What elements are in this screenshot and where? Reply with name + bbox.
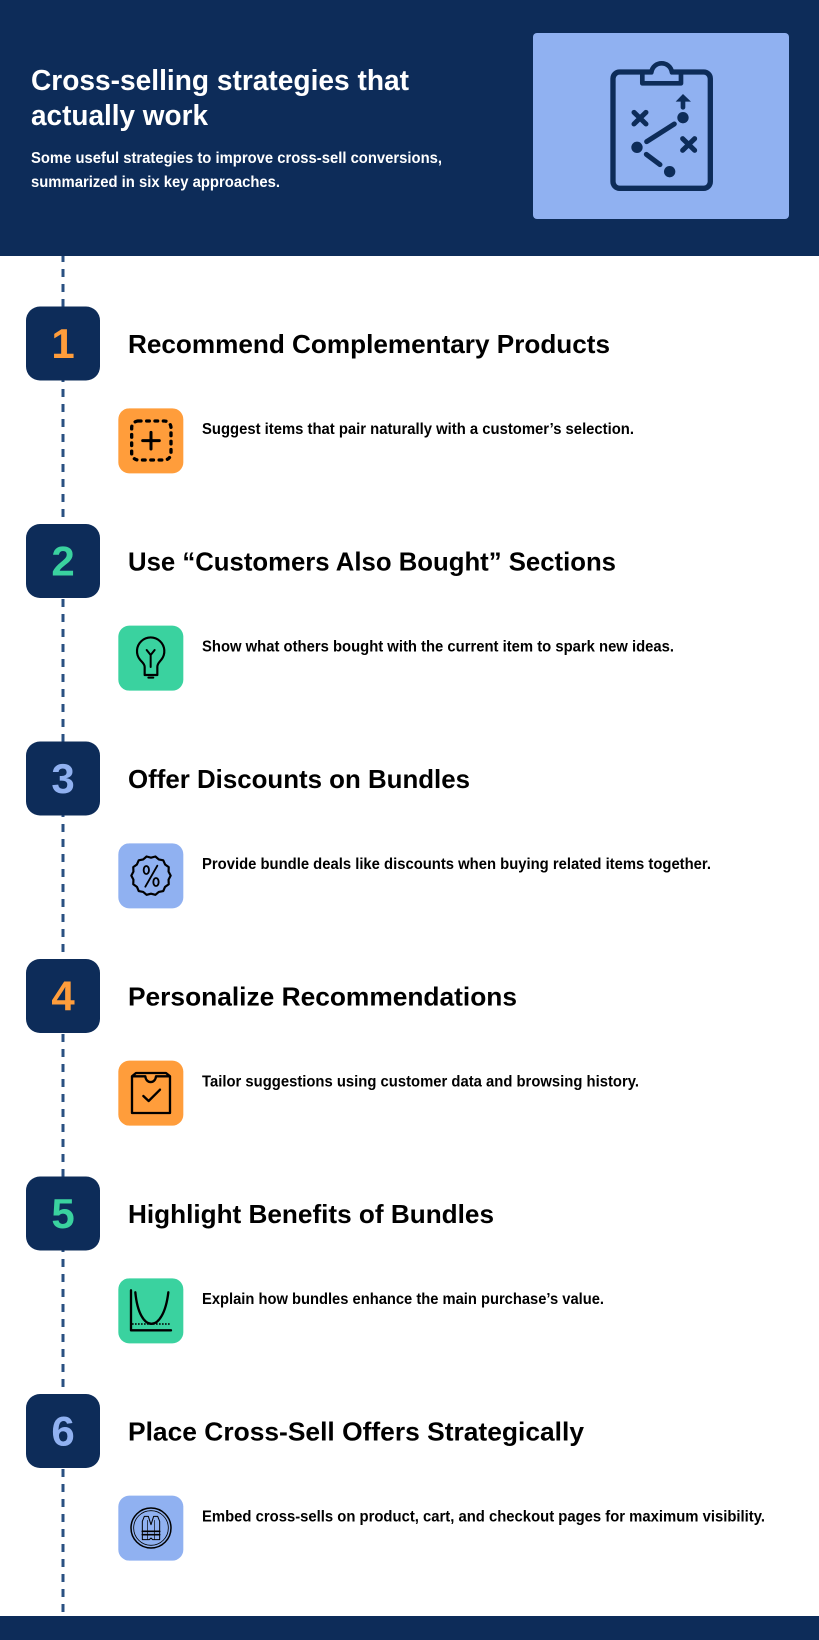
number badge 2 xyxy=(26,524,100,598)
heading 3: Offer Discounts on Bundles xyxy=(128,764,470,794)
subtitle: summarized in six key approaches. xyxy=(31,174,280,191)
heading 5: Highlight Benefits of Bundles xyxy=(128,1199,494,1229)
step 1 xyxy=(26,306,634,473)
title: actually work xyxy=(31,100,209,132)
number badge 6: 6 xyxy=(51,1408,75,1454)
step 3 xyxy=(26,742,711,908)
step 2 xyxy=(26,524,674,691)
icon: light bulb xyxy=(118,626,183,691)
number badge 1: 1 xyxy=(51,320,75,367)
icon panel: clipboard playbook xyxy=(533,33,789,219)
number badge 4: 4 xyxy=(51,972,75,1020)
description 4: Tailor suggestions using customer data and browsing history. xyxy=(202,1074,639,1090)
dashed timeline xyxy=(62,254,64,1616)
number badge 2: 2 xyxy=(51,538,75,584)
number badge 4 xyxy=(26,959,100,1033)
heading 1: Recommend Complementary Products xyxy=(128,329,610,359)
footer bar xyxy=(0,1616,819,1640)
icon: curve chart xyxy=(118,1278,183,1343)
heading 6: Place Cross-Sell Offers Strategically xyxy=(128,1416,585,1446)
number badge 5 xyxy=(26,1176,100,1250)
step 6 xyxy=(26,1394,765,1561)
description 2: Show what others bought with the current item to spark new ideas. xyxy=(202,638,674,656)
number badge 6 xyxy=(26,1394,100,1468)
heading 4: Personalize Recommendations xyxy=(128,982,517,1012)
title: Cross-selling strategies that xyxy=(31,65,409,97)
heading 2: Use “Customers Also Bought” Sections xyxy=(128,546,616,576)
icon: percent badge xyxy=(118,843,183,908)
description 3: Provide bundle deals like discounts when buying related items together. xyxy=(202,856,711,873)
description 6: Embed cross-sells on product, cart, and checkout pages for maximum visibility. xyxy=(202,1508,765,1526)
number badge 3: 3 xyxy=(51,755,75,802)
title xyxy=(31,65,409,132)
description 1: Suggest items that pair naturally with a customer’s selection. xyxy=(202,421,634,438)
number badge 3 xyxy=(26,742,100,816)
step 4 xyxy=(26,959,639,1126)
subtitle: Some useful strategies to improve cross-sell conversions, xyxy=(31,150,442,167)
step 5 xyxy=(26,1176,604,1343)
icon: box with check xyxy=(118,1061,183,1126)
description 5: Explain how bundles enhance the main purchase’s value. xyxy=(202,1291,604,1308)
subtitle xyxy=(31,150,442,191)
number badge 5: 5 xyxy=(51,1190,75,1237)
header banner xyxy=(0,0,819,256)
icon: dashed box with plus xyxy=(118,408,183,473)
icon: safety vest badge xyxy=(118,1496,183,1561)
number badge 1 xyxy=(26,306,100,380)
